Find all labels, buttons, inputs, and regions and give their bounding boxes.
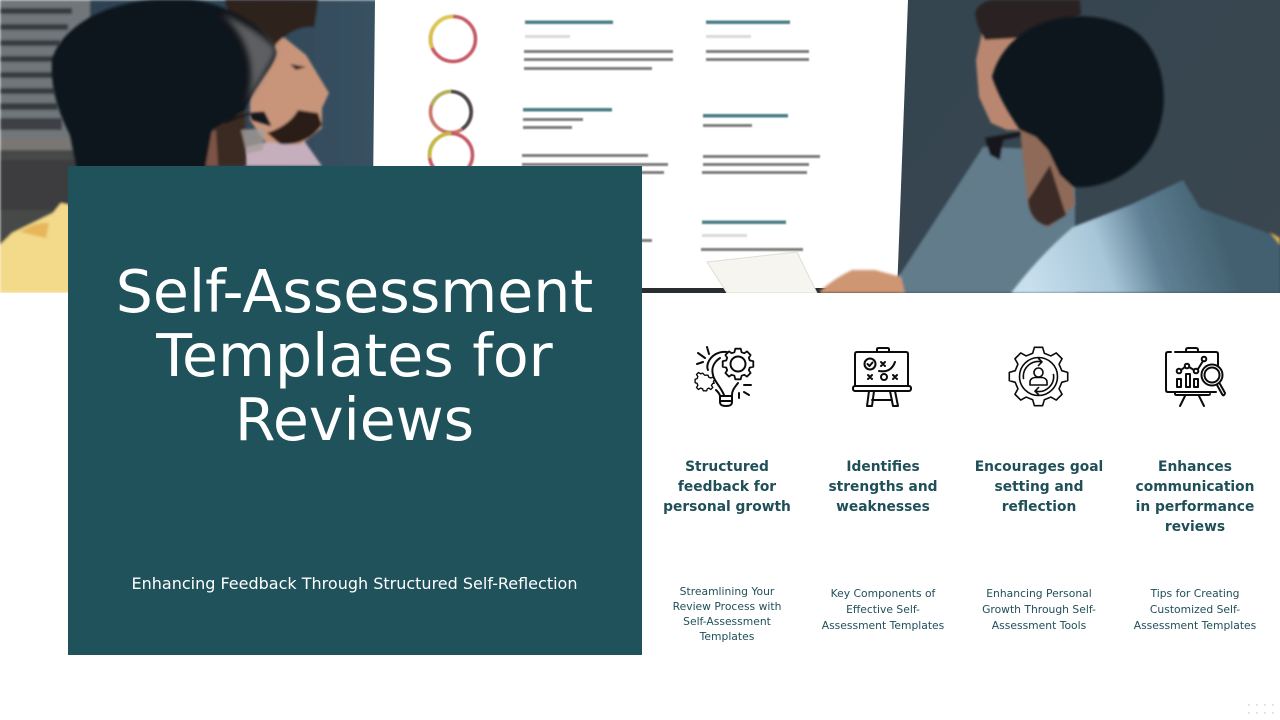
- text: column 1: Review Process with: [673, 600, 781, 613]
- left background wall and blinds: [0, 0, 380, 293]
- heading: column 3: reflection: [1002, 498, 1076, 514]
- text: column 1: Streamlining Your: [680, 585, 774, 598]
- text: column 3: Assessment Tools: [992, 619, 1086, 632]
- text: column 2: [822, 586, 944, 632]
- man in grey shirt: [820, 0, 1081, 293]
- icon: lightbulb with gears: [694, 346, 754, 407]
- heading: column 4: communication: [1136, 478, 1254, 494]
- subtitle: Enhancing Feedback Through Structured Self-Reflection: [132, 574, 577, 593]
- heading: column 2: strengths and: [828, 478, 938, 494]
- icon: presentation chart with magnifier: [1165, 347, 1226, 407]
- heading: column 1: [663, 458, 791, 514]
- heading: column 1: personal growth: [663, 498, 791, 514]
- title: Reviews: [235, 386, 474, 454]
- decorative dot grid: [1248, 704, 1274, 714]
- title: Templates for: [156, 322, 553, 390]
- title: Self-Assessment: [116, 258, 593, 326]
- text: column 3: Growth Through Self-: [982, 603, 1096, 616]
- text: column 2: Key Components of: [831, 586, 935, 600]
- heading: column 4: reviews: [1165, 518, 1225, 534]
- text: column 4: Customized Self-: [1150, 603, 1240, 616]
- foreground man, right: [992, 16, 1280, 293]
- heading: column 4: Enhances: [1158, 458, 1232, 474]
- heading: column 3: [975, 458, 1103, 514]
- icon: gear with person: [1008, 346, 1068, 406]
- heading: column 1: feedback for: [678, 478, 776, 494]
- icon: strategy board on easel: [852, 347, 912, 407]
- right background wall: [897, 0, 1280, 293]
- text: column 4: [1134, 586, 1256, 632]
- heading: column 4: [1136, 458, 1254, 534]
- text: column 1: Self-Assessment: [683, 615, 771, 628]
- board text lines: [522, 20, 820, 251]
- text: column 3: [982, 586, 1096, 632]
- text: column 2: Assessment Templates: [822, 619, 944, 632]
- text: column 1: Templates: [700, 630, 754, 643]
- yellow shirt: [0, 203, 90, 293]
- bearded man: [225, 0, 329, 166]
- heading: column 3: Encourages goal: [975, 458, 1103, 474]
- text: column 4: Assessment Templates: [1134, 619, 1256, 632]
- board donut charts: [430, 16, 476, 176]
- text: column 3: Enhancing Personal: [986, 586, 1092, 600]
- title panel: [68, 166, 642, 654]
- heading: column 1: Structured: [685, 458, 769, 474]
- heading: column 3: setting and: [994, 478, 1084, 494]
- heading: column 4: in performance: [1136, 498, 1254, 514]
- text: column 4: Tips for Creating: [1150, 586, 1240, 600]
- hero photo: team reviewing a report board: [0, 0, 1280, 293]
- title: [116, 258, 593, 454]
- heading: column 2: weaknesses: [836, 498, 930, 514]
- foreground man, left: [52, 0, 276, 175]
- text: column 1: [673, 585, 781, 643]
- report board: [372, 0, 908, 293]
- text: column 2: Effective Self-: [846, 603, 920, 616]
- heading: column 2: Identifies: [846, 458, 920, 474]
- tablet on the table: [707, 252, 817, 293]
- heading: column 2: [828, 458, 938, 514]
